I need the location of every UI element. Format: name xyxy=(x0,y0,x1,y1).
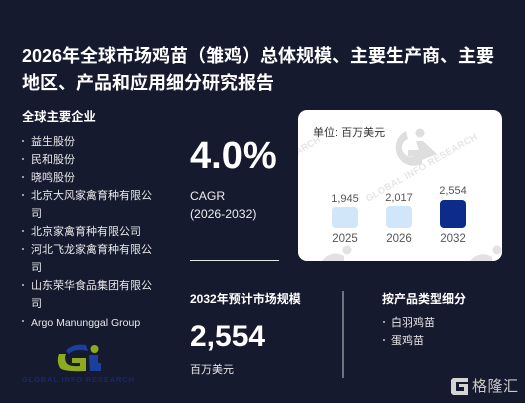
market size unit: 百万美元 xyxy=(190,364,234,376)
company list: 晓鸣股份 xyxy=(31,172,75,184)
market size value: 2,554 xyxy=(190,320,265,353)
panel: bar chart card xyxy=(298,110,502,261)
vertical divider xyxy=(342,291,344,378)
CAGR label: (2026-2032) xyxy=(190,207,256,221)
company list: 司 xyxy=(31,208,42,220)
brand name: 格隆汇 xyxy=(472,378,519,395)
company list xyxy=(22,136,152,329)
divider under CAGR xyxy=(190,260,279,261)
year 2025: 2025 xyxy=(332,233,358,245)
title xyxy=(22,46,494,93)
logo: Global Info Research xyxy=(22,344,134,384)
bar xyxy=(332,207,358,228)
title: 地区、产品和应用细分研究报告 xyxy=(22,73,274,93)
value 2025: 1,945 xyxy=(331,193,359,205)
value 2032: 2,554 xyxy=(439,185,467,197)
bar 2025 xyxy=(331,193,359,245)
brand mark: Gelonghui xyxy=(451,378,519,395)
company list: 司 xyxy=(31,262,42,274)
CAGR value: 4.0% xyxy=(190,135,277,177)
title: 2026年全球市场鸡苗（雏鸡）总体规模、主要生产商、主要 xyxy=(22,46,494,66)
company list: 民和股份 xyxy=(31,154,75,166)
panel: by product type xyxy=(382,292,466,347)
company list: 司 xyxy=(31,298,42,310)
watermark xyxy=(298,128,502,261)
value 2026: 2,017 xyxy=(385,192,413,204)
CAGR label: CAGR xyxy=(190,189,225,203)
item: white feather: 白羽鸡苗 xyxy=(391,317,435,329)
watermark: GLOBAL INFO RESEARCH xyxy=(364,132,480,205)
heading: market size: 2032年预计市场规模 xyxy=(190,292,301,306)
bar 2026 xyxy=(385,192,413,245)
bar 2032 xyxy=(439,185,467,245)
company list: Argo Manunggal Group xyxy=(31,317,140,329)
year 2026: 2026 xyxy=(386,233,412,245)
company list: 河北飞龙家禽育种有限公 xyxy=(31,244,152,256)
year 2032: 2032 xyxy=(440,233,466,245)
panel: global key companies xyxy=(22,110,152,329)
panel: 2032 market size xyxy=(190,292,301,376)
bar xyxy=(386,206,412,228)
company list: 益生股份 xyxy=(31,136,75,148)
company list: 山东荣华食品集团有限公 xyxy=(31,280,152,292)
company list: 北京大风家禽育种有限公 xyxy=(31,190,152,202)
heading: companies: 全球主要企业 xyxy=(22,110,96,124)
CAGR label xyxy=(190,189,256,221)
unit label: 单位: 百万美元 xyxy=(313,127,385,139)
heading: product type: 按产品类型细分 xyxy=(382,292,466,306)
bar xyxy=(440,200,466,228)
item: egg chick: 蛋鸡苗 xyxy=(391,335,424,347)
icon: G xyxy=(451,378,468,395)
company list: 北京家禽育种有限公司 xyxy=(31,226,141,238)
logo: Global Info Research: GLOBAL INFO RESEARCH xyxy=(22,375,134,384)
